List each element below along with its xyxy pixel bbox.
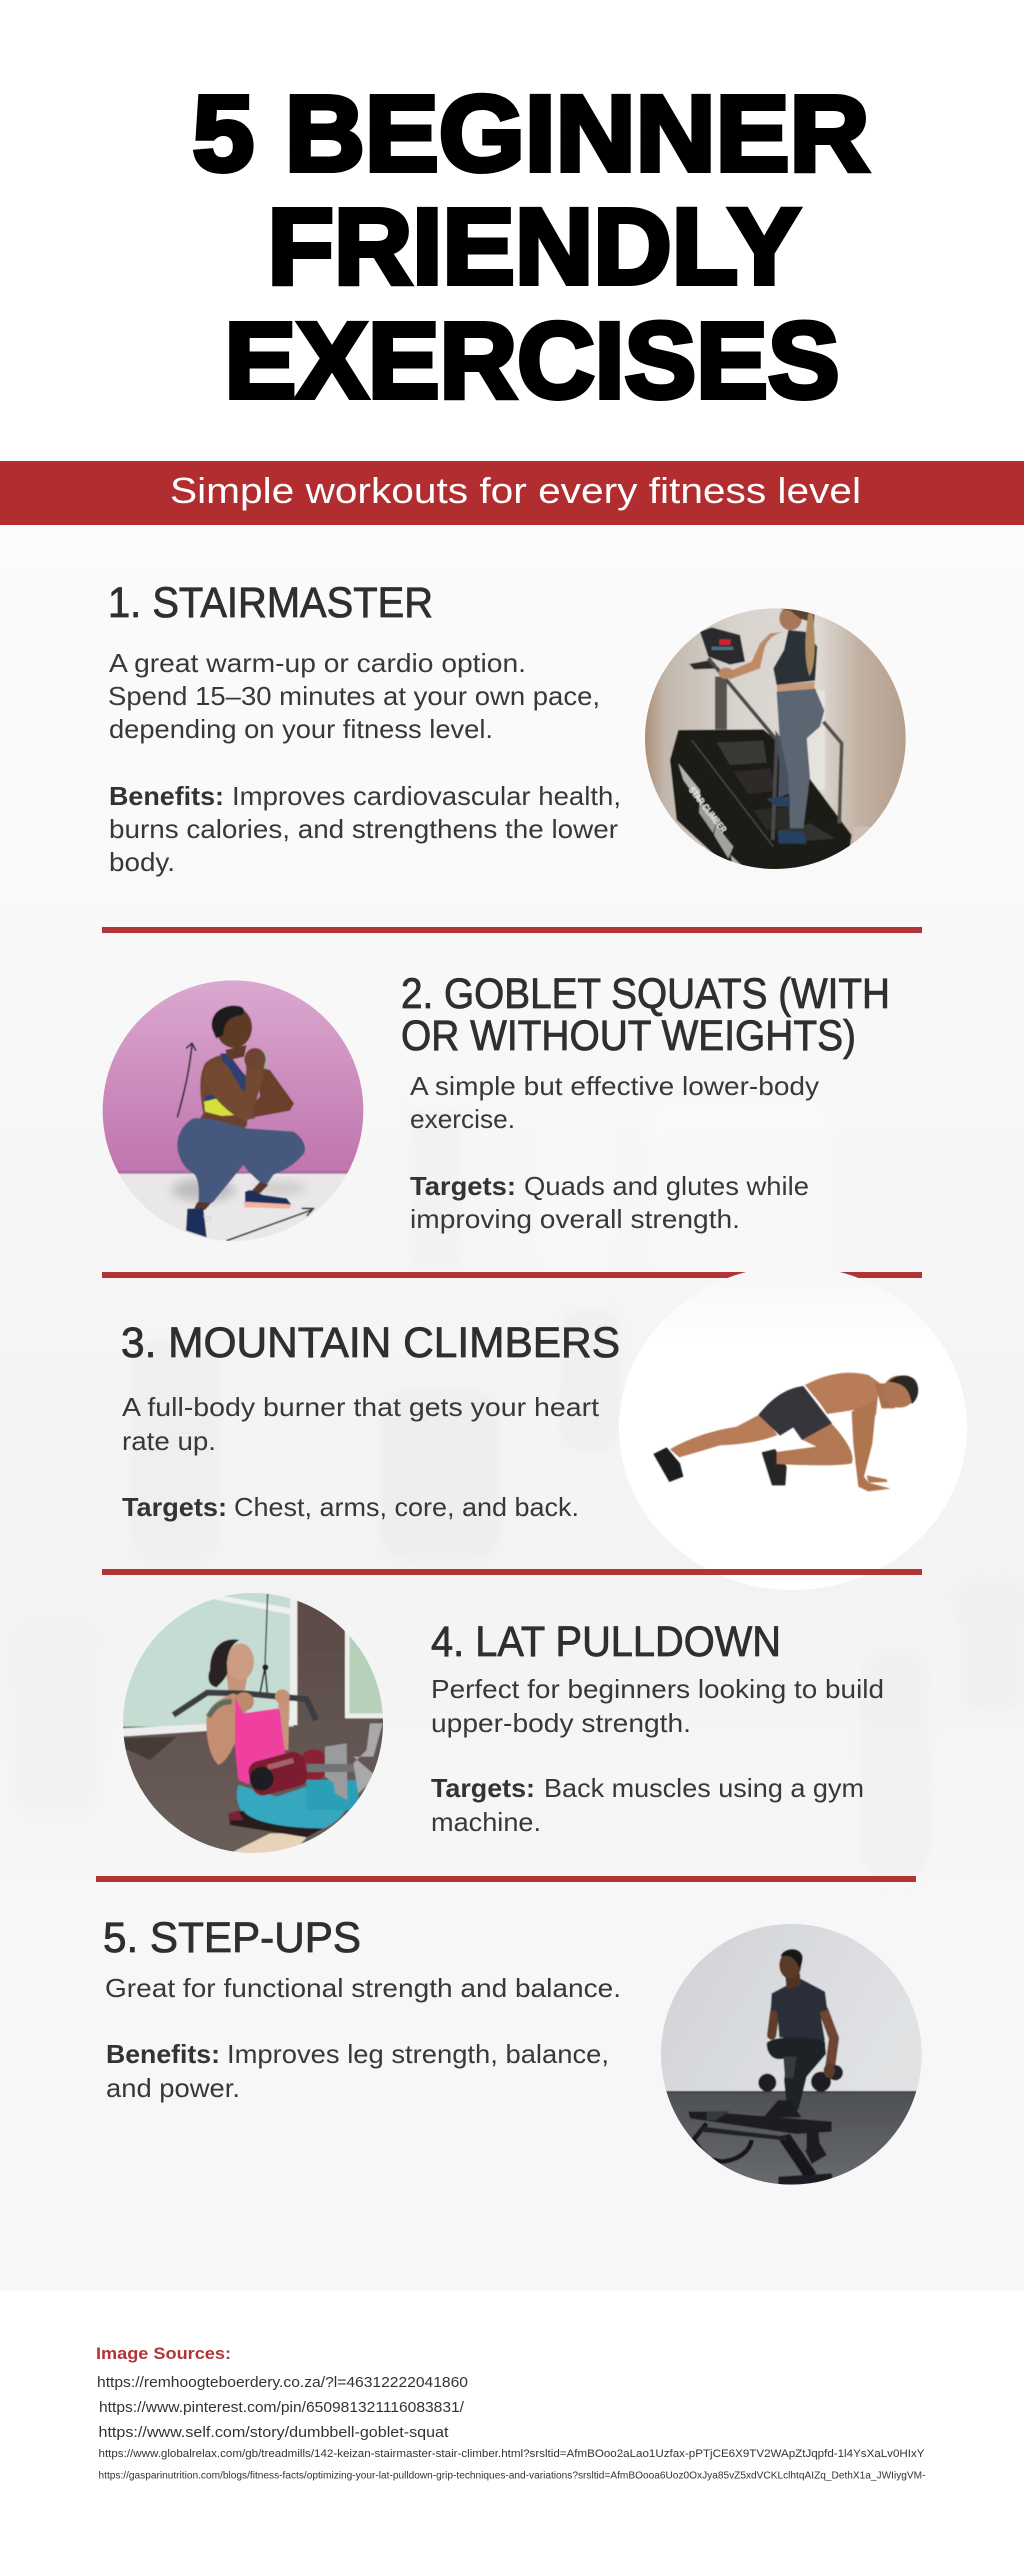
panel: stairmaster: [108, 579, 907, 877]
divider: [102, 1272, 922, 1278]
panel: lat pulldown: [120, 1590, 884, 1857]
divider: [102, 1569, 922, 1575]
text block: [108, 648, 621, 877]
text block: A great warm-up or cardio option.: [109, 648, 526, 678]
panel: mountain climbers: [121, 1266, 967, 1590]
text block: Chest, arms, core, and back.: [234, 1492, 579, 1522]
text block: Targets:: [431, 1773, 535, 1803]
title: [192, 72, 870, 420]
text block: [105, 1973, 621, 2103]
heading: OR WITHOUT WEIGHTS): [401, 1012, 856, 1060]
text block: depending on your fitness level.: [109, 714, 493, 744]
title: FRIENDLY: [268, 186, 800, 306]
footer white band: [0, 2291, 1024, 2560]
text block: machine.: [431, 1807, 541, 1837]
panel: step-ups: [103, 1914, 923, 2188]
icon: step-up photo: [660, 1923, 923, 2188]
text block: Targets:: [410, 1171, 516, 1201]
heading: 3. MOUNTAIN CLIMBERS: [121, 1319, 620, 1367]
text block: Perfect for beginners looking to build: [431, 1674, 884, 1704]
white circle behind photo: [619, 1266, 967, 1590]
icon: lat pulldown photo: [120, 1590, 387, 1857]
text block: Improves leg strength, balance,: [227, 2039, 609, 2069]
divider: [102, 927, 922, 933]
text block: [410, 1071, 819, 1234]
heading: [401, 970, 890, 1060]
heading: 1. STAIRMASTER: [108, 579, 433, 627]
text block: Targets:: [122, 1492, 227, 1522]
text block: Back muscles using a gym: [544, 1773, 864, 1803]
text block: improving overall strength.: [410, 1204, 740, 1234]
text block: exercise.: [410, 1104, 515, 1134]
text block: Benefits:: [109, 781, 224, 811]
icon: stair climber photo: STAR CLIMBER: [687, 785, 729, 835]
title: EXERCISES: [224, 300, 840, 420]
text block: Spend 15–30 minutes at your own pace,: [108, 681, 600, 711]
text block: Quads and glutes while: [524, 1171, 809, 1201]
icon: stair climber photo: [643, 606, 907, 872]
image sources: https://www.pinterest.com/pin/650981321116083831/: [99, 2399, 465, 2416]
text block: rate up.: [122, 1426, 216, 1456]
text block: A simple but effective lower-body: [410, 1071, 819, 1101]
heading: 2. GOBLET SQUATS (WITH: [401, 970, 890, 1018]
text block: body.: [109, 847, 175, 877]
subtitle banner: Simple workouts for every fitness level: [170, 470, 861, 511]
image sources: https://remhoogteboerdery.co.za/?l=46312222041860: [97, 2374, 468, 2391]
subtitle banner: [0, 461, 1024, 525]
image sources: https://www.globalrelax.com/gb/treadmills/142-keizan-stairmaster-stair-climber.html?srsltid=AfmBOoo2aLao1Uzfax-pPTjCE6X9TV2WApZtJqpfd-1l4YsXaLv0HIxY: [98, 2448, 925, 2460]
panel: goblet squats: [100, 970, 890, 1246]
text block: and power.: [106, 2073, 240, 2103]
text block: A full-body burner that gets your heart: [122, 1392, 600, 1422]
image sources: https://www.self.com/story/dumbbell-goblet-squat: [98, 2424, 449, 2441]
text block: burns calories, and strengthens the lower: [109, 814, 618, 844]
title: 5 BEGINNER: [192, 72, 870, 194]
divider: [96, 1876, 916, 1882]
icon: goblet squat photo: [100, 978, 367, 1246]
image sources: Image Sources:: [96, 2344, 231, 2363]
heading: 5. STEP-UPS: [103, 1914, 361, 1962]
text block: Great for functional strength and balance.: [105, 1973, 621, 2003]
heading: 4. LAT PULLDOWN: [431, 1618, 781, 1666]
image sources: [96, 2344, 925, 2482]
text block: Benefits:: [106, 2039, 220, 2069]
image sources: https://gasparinutrition.com/blogs/fitness-facts/optimizing-your-lat-pulldown-grip-techniques-and-variations?srsltid=AfmBOooa6Uoz0OxJya85vZ5xdVCKLclhtqAIZq_DethX1a_JWIiygVM-: [98, 2470, 925, 2482]
text block: upper-body strength.: [431, 1708, 691, 1738]
icon: mountain climber figure: [653, 1373, 918, 1491]
faded gym photo background: [0, 525, 1024, 2291]
text block: [431, 1674, 884, 1837]
text block: [122, 1392, 600, 1522]
text block: Improves cardiovascular health,: [232, 781, 621, 811]
